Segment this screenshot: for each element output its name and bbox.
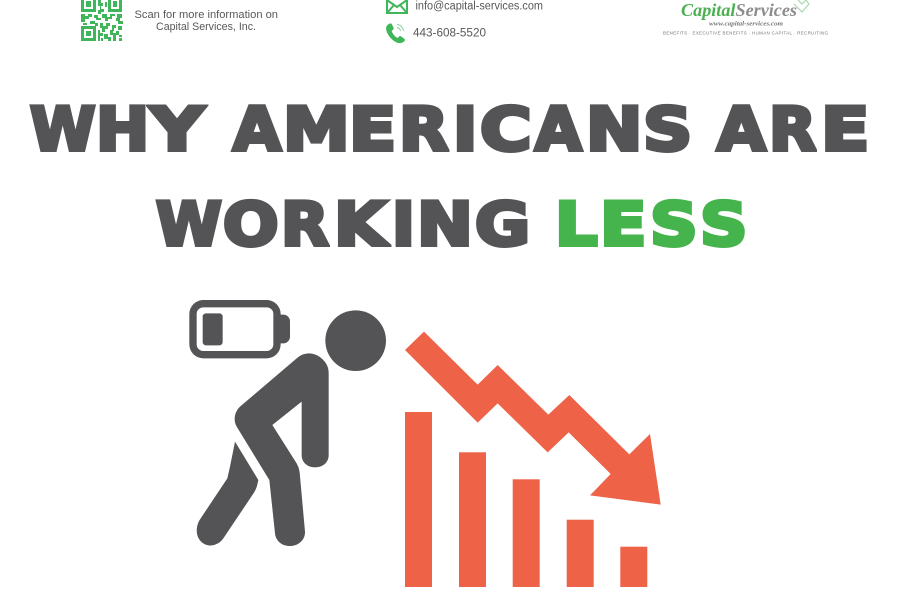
logo wordmark: CapitalServices bbox=[681, 0, 797, 20]
icon: phone bbox=[386, 23, 405, 43]
title line 1: H bbox=[96, 95, 149, 165]
title line 2: K bbox=[334, 190, 386, 260]
logo: Capital Services bbox=[663, 0, 828, 36]
title line 1: E bbox=[820, 95, 869, 165]
title line 2: G bbox=[475, 190, 530, 260]
title line 2: S bbox=[700, 190, 747, 260]
title line 2: E bbox=[600, 190, 647, 260]
title line 2: R bbox=[281, 190, 328, 260]
icon: tired person with low battery bbox=[189, 300, 386, 546]
title line 1: I bbox=[453, 95, 477, 165]
title line 1: C bbox=[480, 95, 532, 165]
logo diamonds bbox=[794, 0, 809, 12]
title line 1: W bbox=[30, 95, 95, 165]
title line 1: A bbox=[717, 95, 765, 165]
logo url: www.capital-services.com bbox=[709, 20, 783, 28]
text: scan prompt bbox=[134, 9, 278, 33]
title line 1: E bbox=[349, 95, 396, 165]
text: phone number: 443-608-5520 bbox=[413, 28, 486, 40]
icon: QR code bbox=[81, 0, 123, 41]
title line 1 bbox=[29, 95, 869, 165]
icon: declining bar chart with arrow bbox=[405, 332, 661, 587]
title line 2: L bbox=[555, 190, 597, 260]
title line 2: W bbox=[156, 190, 221, 260]
text: scan prompt: Capital Services, Inc. bbox=[156, 21, 256, 33]
title line 1: S bbox=[643, 95, 692, 165]
title line 2 bbox=[155, 190, 747, 260]
title line 1: R bbox=[399, 95, 449, 165]
title line 2: S bbox=[650, 190, 698, 260]
text: scan prompt: Scan for more information on bbox=[134, 9, 278, 21]
header: contact strip bbox=[81, 0, 828, 43]
body and front leg bbox=[235, 353, 329, 546]
icon: envelope bbox=[387, 0, 407, 13]
head bbox=[325, 310, 386, 371]
title line 1: N bbox=[586, 95, 642, 165]
logo tagline: BENEFITS · EXECUTIVE BENEFITS · HUMAN CAPITAL · RECRUITING bbox=[663, 30, 828, 36]
bars bbox=[405, 412, 647, 587]
battery bbox=[189, 300, 290, 358]
title line 2: I bbox=[392, 190, 415, 260]
falling arrow bbox=[405, 332, 661, 505]
text: email: info@capital-services.com bbox=[416, 0, 543, 12]
title line 1: M bbox=[283, 95, 349, 165]
title line 1: A bbox=[535, 95, 581, 165]
title line 2: O bbox=[223, 190, 278, 260]
title line 1: R bbox=[769, 95, 816, 165]
title line 1: A bbox=[233, 95, 281, 165]
title line 2: N bbox=[417, 190, 473, 260]
back leg bbox=[197, 442, 258, 545]
title line 1: Y bbox=[150, 95, 204, 165]
title bbox=[29, 95, 869, 260]
